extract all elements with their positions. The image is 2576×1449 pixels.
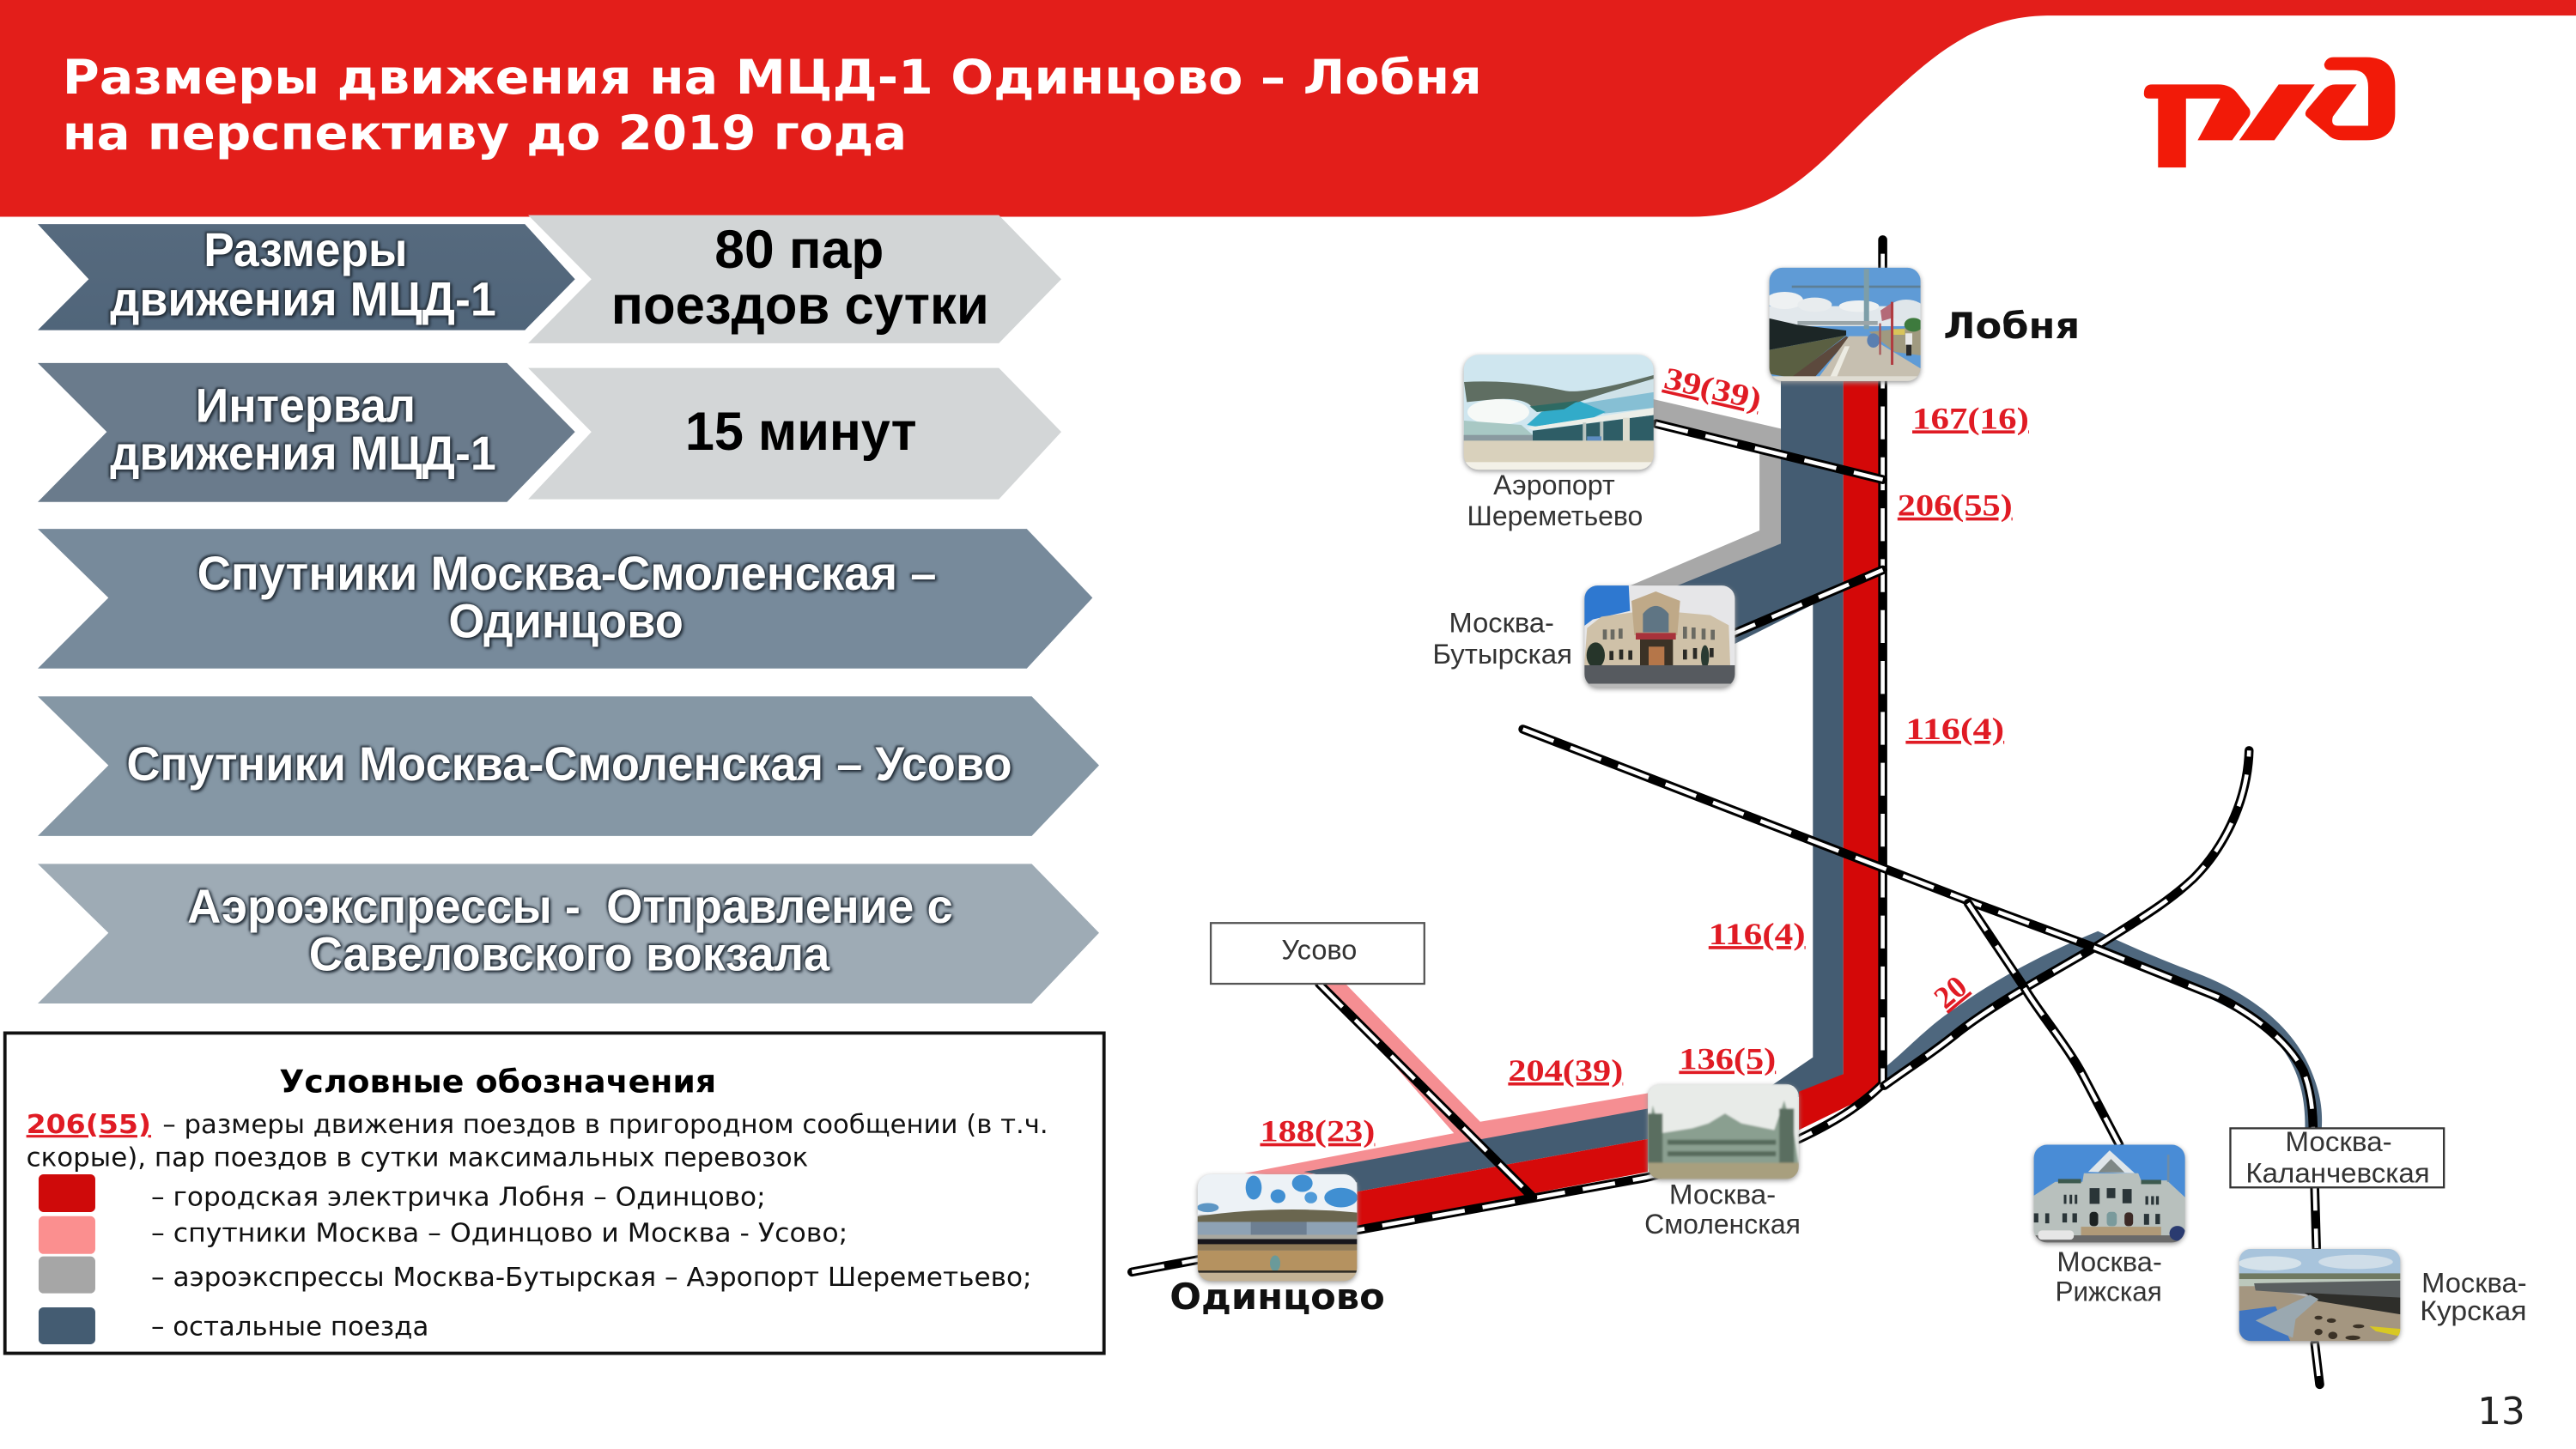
track: Usovo branch	[1319, 984, 1533, 1197]
box: Usovo: Усово	[1281, 934, 1357, 965]
band: other trains lower	[1303, 1108, 1648, 1191]
value: 80 pairs	[611, 220, 989, 336]
legend title: Условные обозначения	[279, 1063, 716, 1100]
text: sputnik Odintsovo: Спутники Москва-Смоленская –	[197, 547, 937, 600]
traffic figures: 116(4)	[1905, 712, 2004, 746]
legend item: city train: – городская электричка Лобня – Одинцово;	[151, 1182, 766, 1212]
label: Butyrskaya: Москва-	[1449, 608, 1554, 639]
title: Размеры движения на МЦД-1 Одинцово – Лобня	[63, 51, 1482, 106]
track: Butyrskaya branch	[1725, 570, 1883, 637]
panel: chevron sizes	[38, 223, 575, 330]
traffic figures: 204(39)	[1508, 1053, 1623, 1088]
box: Moscow-Kalanchevskaya: Каланчевская	[2245, 1158, 2430, 1189]
photo: Moscow-Rizhskaya	[2031, 1143, 2187, 1245]
panel: chevron sputnik Usovo	[38, 696, 1099, 836]
photo: Moscow-Butyrskaya	[1582, 584, 1739, 689]
legend description	[27, 1110, 1048, 1173]
track: Sheremetyevo branch	[1656, 424, 1883, 480]
title: на перспективу до 2019 года	[63, 106, 907, 161]
traffic figures: 20	[1928, 969, 1973, 1016]
value: 80 pairs: 80 пар	[714, 220, 884, 280]
value: 80 pairs: поездов сутки	[611, 276, 989, 336]
heading: sizes: Размеры	[204, 223, 407, 276]
panel: chevron sputnik Odintsovo	[38, 529, 1092, 669]
track: cross line to Kursk	[1523, 729, 2320, 1385]
panel: chevron interval	[38, 363, 575, 502]
track: main vertical and Odintsovo line	[1132, 239, 1883, 1272]
band: city train lower	[1357, 1139, 1648, 1227]
label: Smolenskaya	[1644, 1179, 1801, 1240]
traffic figures: 39(39)	[1661, 361, 1765, 416]
track: ring curve	[1885, 750, 2249, 1086]
label: Rizhskaya: Рижская	[2055, 1276, 2162, 1307]
traffic figures: 116(4)	[1709, 917, 1806, 951]
band: other trains vertical	[1676, 381, 1844, 1097]
track: Rizhskaya branch	[1968, 903, 2119, 1145]
legend item: sputnik: – спутники Москва – Одинцово и Москва - Усово;	[151, 1218, 848, 1248]
traffic figures: 167(16)	[1912, 401, 2029, 435]
photo: Moscow-Smolenskaya	[1648, 1084, 1799, 1179]
photo: Sheremetyevo airport	[1461, 354, 1659, 470]
band: aeroexpress grey	[1625, 399, 1781, 588]
heading: interval: Интервал	[196, 379, 416, 433]
logo: RZD	[2144, 58, 2395, 167]
box: Moscow-Kalanchevskaya: Москва-	[2285, 1126, 2392, 1157]
heading: interval	[110, 379, 496, 480]
legend item: city train	[39, 1174, 766, 1212]
panel: 15 minutes value	[528, 368, 1061, 500]
traffic figures: 206(55)	[1898, 488, 2013, 523]
title	[63, 51, 1482, 161]
panel: chevron aeroexpress	[38, 864, 1099, 1003]
photo: Odintsovo	[1195, 1173, 1359, 1282]
text: sputnik Odintsovo: Одинцово	[448, 594, 683, 647]
label: Sheremetyevo: Шереметьево	[1467, 500, 1643, 531]
label: Odintsovo: Одинцово	[1170, 1276, 1385, 1318]
text: aeroexpress: Савеловского вокзала	[309, 928, 830, 981]
photo: Lobnya	[1766, 264, 1926, 385]
legend item: sputnik	[39, 1216, 848, 1254]
label: Smolenskaya: Москва-	[1669, 1179, 1776, 1210]
text: sputnik Usovo: Спутники Москва-Смоленская – Усово	[126, 737, 1012, 791]
chart: railway scheme	[1132, 239, 2527, 1385]
label: Kurskaya: Курская	[2420, 1295, 2527, 1326]
label: Smolenskaya: Смоленская	[1644, 1209, 1801, 1240]
heading: interval: движения МЦД-1	[110, 427, 496, 480]
label: Rizhskaya: Москва-	[2057, 1246, 2162, 1277]
header banner	[0, 0, 2576, 217]
label: Kurskaya	[2420, 1268, 2527, 1326]
label: Kurskaya: Москва-	[2421, 1268, 2527, 1299]
legend item: aeroexpress: – аэроэкспрессы Москва-Бутырская – Аэропорт Шереметьево;	[151, 1263, 1032, 1293]
text: aeroexpress	[187, 880, 953, 981]
box: Usovo	[1211, 923, 1425, 984]
legend description: – размеры движения поездов в пригородном сообщении (в т.ч.	[162, 1110, 1048, 1140]
legend description: скорые), пар поездов в сутки максимальных перевозок	[27, 1143, 808, 1173]
label: Butyrskaya: Бутырская	[1432, 639, 1572, 670]
band: other trains ring left	[1883, 931, 2103, 1090]
band: other trains ring right	[2098, 931, 2322, 1133]
label: Sheremetyevo	[1467, 470, 1643, 531]
value: 15 minutes: 15 минут	[685, 402, 917, 462]
band: sputnik pink	[1244, 984, 1648, 1176]
heading: sizes	[110, 223, 496, 325]
box: Moscow-Kalanchevskaya	[2230, 1126, 2444, 1189]
panel: legend	[5, 1033, 1104, 1354]
label: Rizhskaya	[2055, 1246, 2162, 1307]
traffic figures	[1260, 361, 2029, 1149]
traffic figures: 136(5)	[1679, 1042, 1776, 1076]
band: city train vertical	[1799, 381, 1880, 1130]
page number: 13	[2477, 1390, 2525, 1434]
label: Butyrskaya	[1432, 608, 1572, 670]
panel: 80 pairs value	[528, 215, 1061, 343]
heading: sizes: движения МЦД-1	[110, 272, 496, 325]
legend item: other trains: – остальные поезда	[151, 1312, 428, 1342]
text: aeroexpress: Аэроэкспрессы - Отправление с	[187, 880, 953, 933]
traffic figures: 188(23)	[1260, 1114, 1375, 1149]
legend item: other trains	[39, 1307, 428, 1344]
text: sputnik Odintsovo	[197, 547, 937, 647]
label: Sheremetyevo: Аэропорт	[1493, 470, 1615, 500]
photo: Moscow-Kurskaya	[2237, 1247, 2403, 1343]
label: Lobnya: Лобня	[1943, 305, 2080, 347]
legend description: 206(55)	[27, 1110, 151, 1140]
